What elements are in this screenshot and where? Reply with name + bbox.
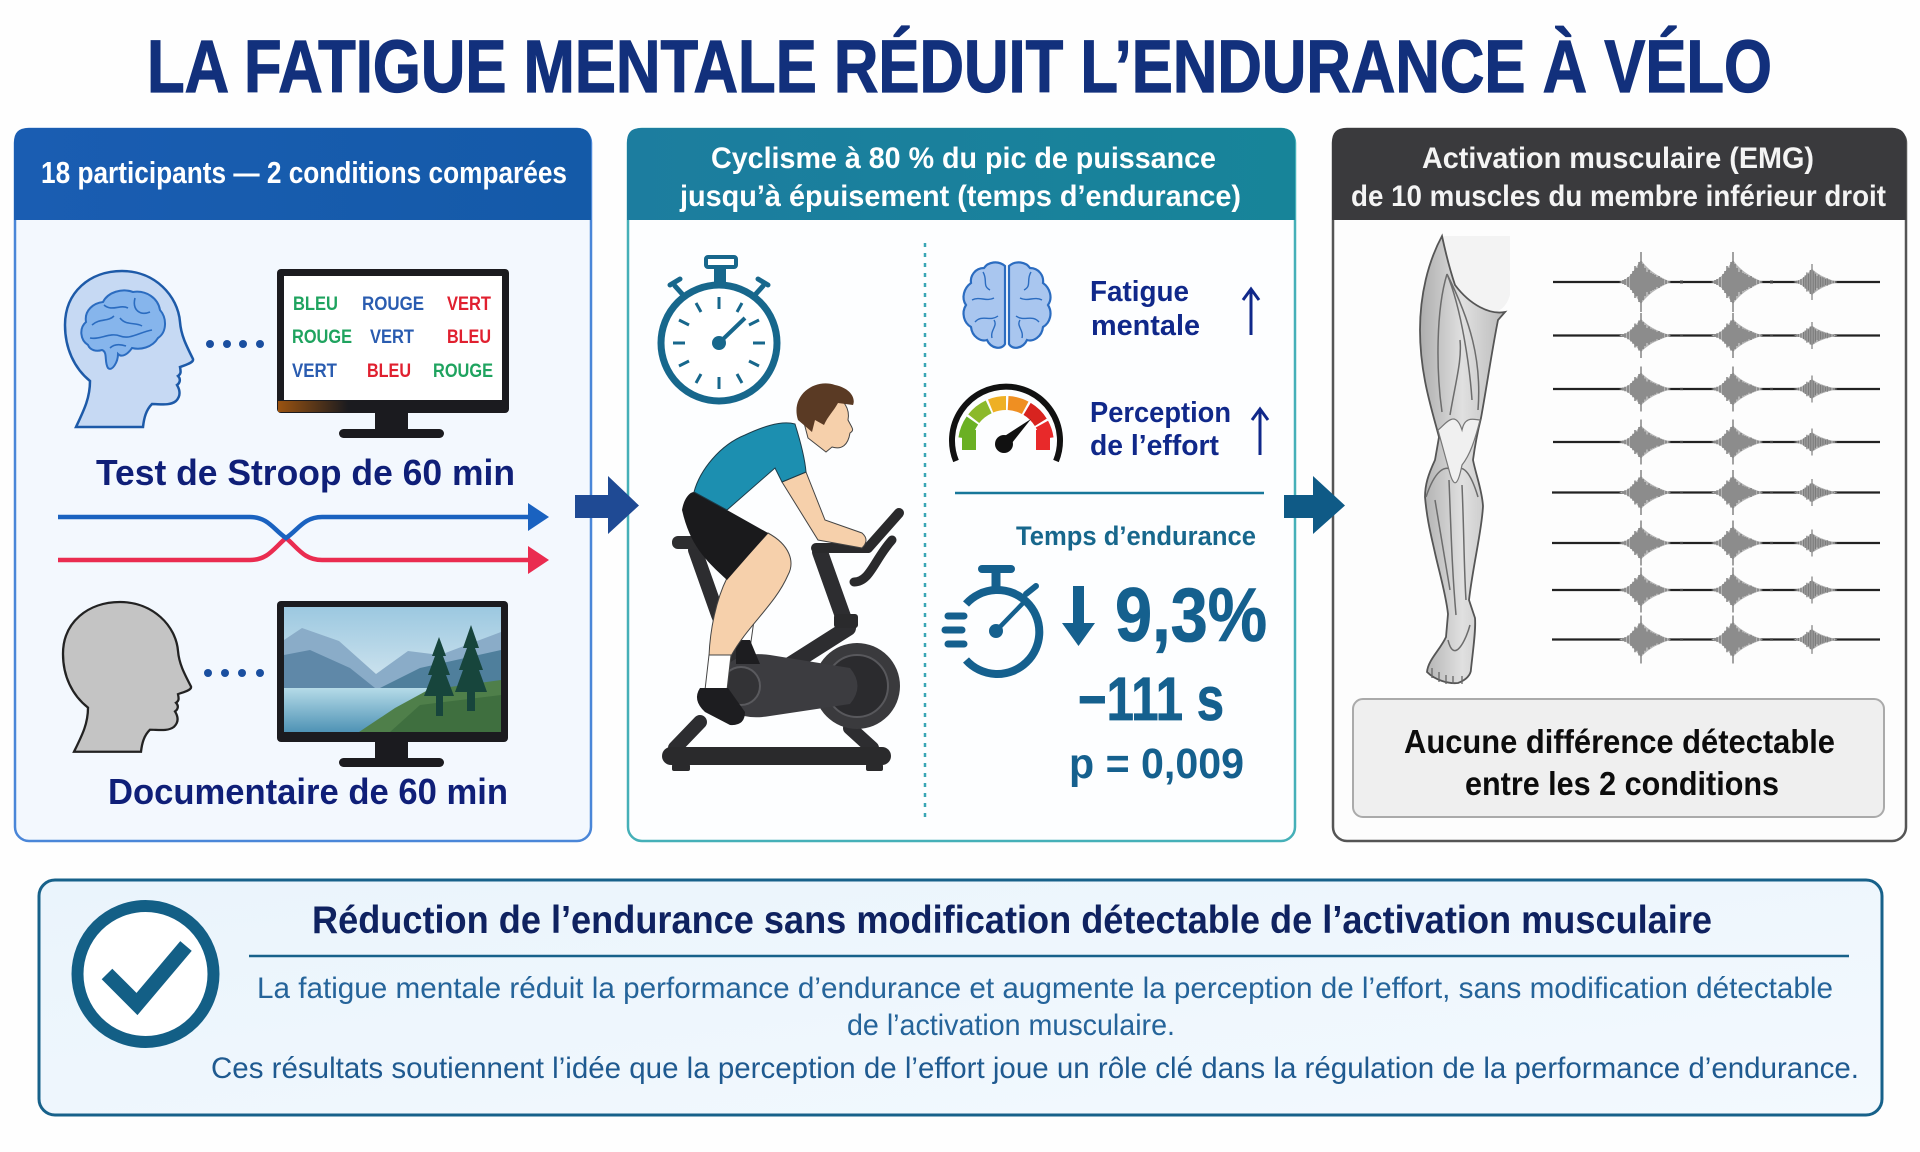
label: documentary: Documentaire de 60 min [108,771,508,812]
panel heading: EMG: Activation musculaire (EMG) [1422,142,1814,175]
label: Stroop test: Test de Stroop de 60 min [96,452,515,493]
panel: conclusion [39,880,1882,1115]
crossover arrows [58,503,549,574]
monitor: Stroop words: VERT [292,361,337,382]
monitor: Stroop words: ROUGE [362,294,424,315]
dotted link: Stroop [206,340,264,348]
panel: cycling test [627,128,1295,841]
monitor: Stroop words: VERT [370,327,414,348]
monitor: landscape [277,601,508,767]
monitor: Stroop words: BLEU [367,361,411,382]
panel heading: cycling [679,142,1241,213]
monitor: Stroop words: ROUGE [433,361,493,382]
stat: 9,3 percent: 9,3% [1115,573,1267,658]
monitor: Stroop words [277,269,509,438]
monitor: Stroop words: BLEU [447,327,491,348]
label: mental fatigue [1090,276,1200,342]
arrow: mental fatigue up [1243,289,1259,335]
arrow: endurance down [1062,586,1095,646]
monitor: Stroop words: BLEU [293,294,338,315]
label: endurance time: Temps d’endurance [1016,521,1256,551]
icon: brain [964,262,1050,348]
stat: minus 111 seconds: −111 s [1078,665,1224,733]
monitor: Stroop words: VERT [447,294,491,315]
monitor: Stroop words: ROUGE [292,327,352,348]
callout: no difference: entre les 2 conditions [1465,765,1779,802]
panel: muscle activation [1332,128,1906,841]
dotted link: documentary [204,669,264,677]
icon: effort gauge [952,387,1060,461]
icon: stopwatch with speed lines [945,569,1039,674]
panel heading: cycling: Cyclisme à 80 % du pic de puissance [711,142,1216,175]
conclusion text: de l’activation musculaire. [847,1009,1175,1042]
conclusion text: La fatigue mentale réduit la performance d’endurance et augmente la perception de l’effort, sans modification détectable [257,972,1833,1005]
stat: p value: p = 0,009 [1069,740,1244,788]
label: perceived effort [1090,397,1231,462]
label: perceived effort: de l’effort [1090,430,1219,462]
arrow: step 1 to step 2 [575,476,639,534]
callout: no difference: Aucune différence détectable [1404,723,1835,760]
icon: grey head [63,602,191,752]
icon: stopwatch [661,257,777,401]
icon: head with brain [65,271,193,427]
panel heading: EMG: de 10 muscles du membre inférieur droit [1351,180,1886,213]
conclusion text [211,972,1859,1085]
panel heading: participants: 18 participants — 2 conditions comparées [41,155,567,190]
label: perceived effort: Perception [1090,397,1231,429]
label: mental fatigue: Fatigue [1090,276,1189,308]
illustration: leg muscles [1420,236,1510,684]
illustration: cyclist on stationary bike [662,383,900,771]
icon: check mark [78,906,214,1042]
callout: no difference [1353,699,1884,817]
panel heading: EMG [1351,142,1886,213]
panel: participants and conditions [14,128,591,841]
chart: EMG traces [1552,252,1880,664]
conclusion text: Ces résultats soutiennent l’idée que la perception de l’effort joue un rôle clé dans la régulation de la performance d’endurance. [211,1052,1859,1085]
arrow: step 2 to step 3 [1284,476,1345,534]
label: mental fatigue: mentale [1091,310,1200,342]
arrow: perceived effort up [1252,409,1268,455]
panel heading: cycling: jusqu’à épuisement (temps d’endurance) [679,180,1241,213]
conclusion heading: Réduction de l’endurance sans modification détectable de l’activation musculaire [312,899,1712,942]
